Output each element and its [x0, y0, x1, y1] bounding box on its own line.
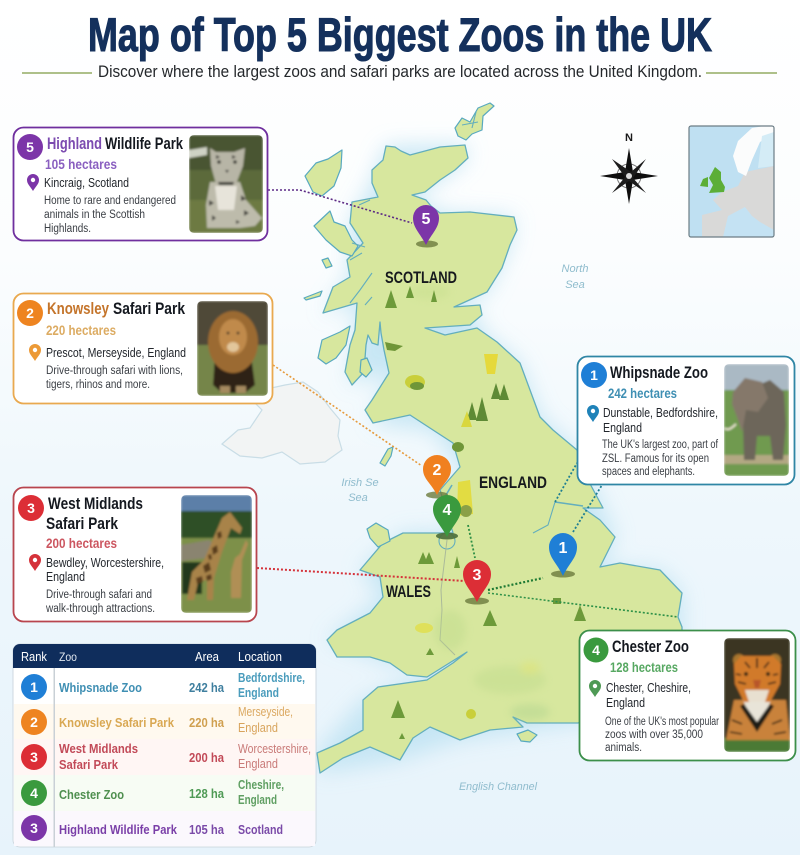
panel: ranking table [13, 644, 316, 847]
row: Whipsnade Zoo: 1 [30, 679, 38, 695]
row: West Midlands Safari Park: Worcestershire, [238, 741, 311, 756]
panel: West Midlands Safari Park [14, 488, 256, 622]
location: Bewdley, Worcestershire, [46, 556, 164, 570]
heading: Chester Zoo [612, 638, 689, 656]
badge: 1 [590, 367, 598, 383]
description [602, 439, 719, 478]
badge [17, 134, 43, 160]
heading [47, 300, 186, 318]
panel: Knowsley Safari Park [14, 294, 272, 404]
photo: lion [197, 301, 268, 396]
row: Whipsnade Zoo: Whipsnade Zoo [59, 680, 142, 695]
table header: Zoo [59, 650, 77, 664]
location: Prescot, Merseyside, England [46, 346, 186, 360]
heading [47, 135, 184, 153]
description [46, 365, 183, 391]
description: tigers, rhinos and more. [46, 379, 150, 391]
sea lochs and estuaries [350, 112, 583, 655]
panel: Chester Zoo [580, 630, 796, 760]
pin 1 [549, 533, 577, 578]
badge: 3 [27, 500, 35, 516]
location [29, 554, 164, 584]
row: West Midlands Safari Park: West Midlands [59, 741, 138, 756]
description [605, 716, 719, 754]
description [45, 589, 155, 615]
heading: Whipsnade Zoo [610, 364, 708, 382]
heading: Highland [47, 135, 102, 153]
location: Kincraig, Scotland [44, 176, 129, 190]
sea labels: North [562, 263, 588, 275]
row: Highland Wildlife Park [21, 815, 283, 841]
location [587, 405, 718, 435]
sea labels [341, 263, 588, 793]
photo: elephant [724, 364, 789, 476]
region labels: SCOTLAND [385, 268, 457, 287]
region labels: ENGLAND [479, 473, 547, 492]
trees and parks [385, 286, 586, 739]
location: Dunstable, Bedfordshire, [603, 406, 718, 420]
land shading [410, 285, 550, 720]
description: spaces and elephants. [602, 466, 695, 478]
table row tints [14, 668, 315, 847]
heading [46, 495, 143, 533]
row: Chester Zoo [21, 777, 284, 807]
description: Drive-through safari with lions, [46, 365, 183, 377]
badge [584, 638, 608, 662]
region labels: WALES [386, 582, 431, 601]
row: West Midlands Safari Park: Safari Park [59, 757, 119, 772]
table header: Rank [21, 650, 48, 664]
row: Whipsnade Zoo: Bedfordshire, [238, 670, 305, 685]
description: animals. [605, 742, 642, 754]
area: 200 hectares [46, 536, 117, 551]
row: Highland Wildlife Park: Scotland [238, 822, 283, 837]
badge: 5 [26, 139, 34, 155]
table header: Area [195, 650, 219, 664]
pin 5 [413, 205, 439, 248]
pin 1: 1 [559, 540, 568, 557]
row: Highland Wildlife Park: 3 [30, 820, 38, 836]
location [589, 680, 691, 710]
row: Knowsley Safari Park: 2 [30, 714, 38, 730]
photo: giraffes [181, 495, 252, 613]
heading: Safari Park [113, 300, 186, 318]
heading: Safari Park [46, 515, 119, 533]
heading: Knowsley [47, 300, 110, 318]
map of the UK [222, 103, 682, 793]
inset locator map [689, 126, 774, 237]
subtitle: Discover where the largest zoos and safari parks are located across the United Kingdom. [98, 63, 702, 81]
row: Highland Wildlife Park: Highland Wildlife Park [59, 822, 178, 837]
heading: West Midlands [48, 495, 143, 513]
description: The UK's largest zoo, part of [602, 439, 719, 451]
row: Chester Zoo: Cheshire, [238, 777, 284, 792]
badge [17, 300, 43, 326]
sea labels: Sea [348, 492, 368, 504]
row: West Midlands Safari Park [21, 741, 311, 772]
pin 4 [433, 495, 461, 540]
compass rose [600, 132, 658, 204]
row: Chester Zoo: Chester Zoo [59, 787, 124, 802]
area: 242 hectares [608, 386, 677, 401]
panel: Highland Wildlife Park [14, 128, 268, 240]
landmass: Great Britain [317, 145, 682, 773]
pin 3 [463, 560, 491, 604]
row: Chester Zoo: 4 [30, 785, 38, 801]
row: Whipsnade Zoo: England [238, 685, 279, 700]
badge: 2 [26, 305, 34, 321]
panel: Whipsnade Zoo [578, 356, 794, 484]
photo: snow leopard [189, 135, 263, 233]
row: Knowsley Safari Park: England [238, 720, 278, 735]
area: 220 hectares [46, 323, 116, 338]
location [27, 174, 129, 191]
area: 128 hectares [610, 660, 678, 675]
location [29, 344, 186, 361]
region labels [385, 268, 547, 601]
badge [18, 495, 44, 521]
pin 2 [423, 455, 451, 498]
compass rose: N [625, 132, 633, 144]
row: West Midlands Safari Park: 200 ha [189, 750, 225, 765]
pin 3: 3 [473, 567, 482, 584]
description: walk-through attractions. [45, 603, 155, 615]
row: West Midlands Safari Park: 3 [30, 749, 38, 765]
description: Highlands. [44, 223, 91, 235]
location: England [606, 696, 645, 710]
island: Ireland [222, 382, 342, 464]
location: England [46, 570, 85, 584]
row: Knowsley Safari Park [21, 704, 293, 735]
table header: Location [238, 650, 282, 664]
connector lines [257, 190, 678, 617]
row: Knowsley Safari Park: 220 ha [189, 715, 225, 730]
row: Chester Zoo: 128 ha [189, 786, 225, 801]
description [44, 195, 176, 235]
row: Chester Zoo: England [238, 792, 277, 807]
description: ZSL. Famous for its open [602, 453, 709, 465]
pin 4: 4 [443, 502, 452, 519]
description: zoos with over 35,000 [605, 729, 703, 741]
row: Whipsnade Zoo: 242 ha [189, 680, 225, 695]
description: Drive-through safari and [46, 589, 152, 601]
description: animals in the Scottish [44, 209, 145, 221]
row: Whipsnade Zoo [21, 670, 305, 700]
row: Knowsley Safari Park: Knowsley Safari Park [59, 715, 175, 730]
sea labels: English Channel [459, 781, 538, 793]
area: 105 hectares [45, 157, 117, 172]
pin 2: 2 [433, 462, 442, 479]
location: Chester, Cheshire, [606, 681, 691, 695]
row: West Midlands Safari Park: England [238, 756, 278, 771]
badge: 4 [592, 642, 600, 658]
sea labels: Irish Se [341, 477, 379, 489]
location: England [603, 421, 642, 435]
badge [581, 362, 607, 388]
description: Home to rare and endangered [44, 195, 176, 207]
table header [13, 644, 316, 668]
sea labels: Sea [565, 279, 585, 291]
description: One of the UK's most popular [605, 716, 719, 728]
heading: Wildlife Park [105, 135, 184, 153]
islands [304, 103, 537, 742]
photo: tiger [724, 638, 790, 752]
row: Knowsley Safari Park: Merseyside, [238, 704, 293, 719]
row: Highland Wildlife Park: 105 ha [189, 822, 225, 837]
pin 5: 5 [422, 211, 431, 228]
